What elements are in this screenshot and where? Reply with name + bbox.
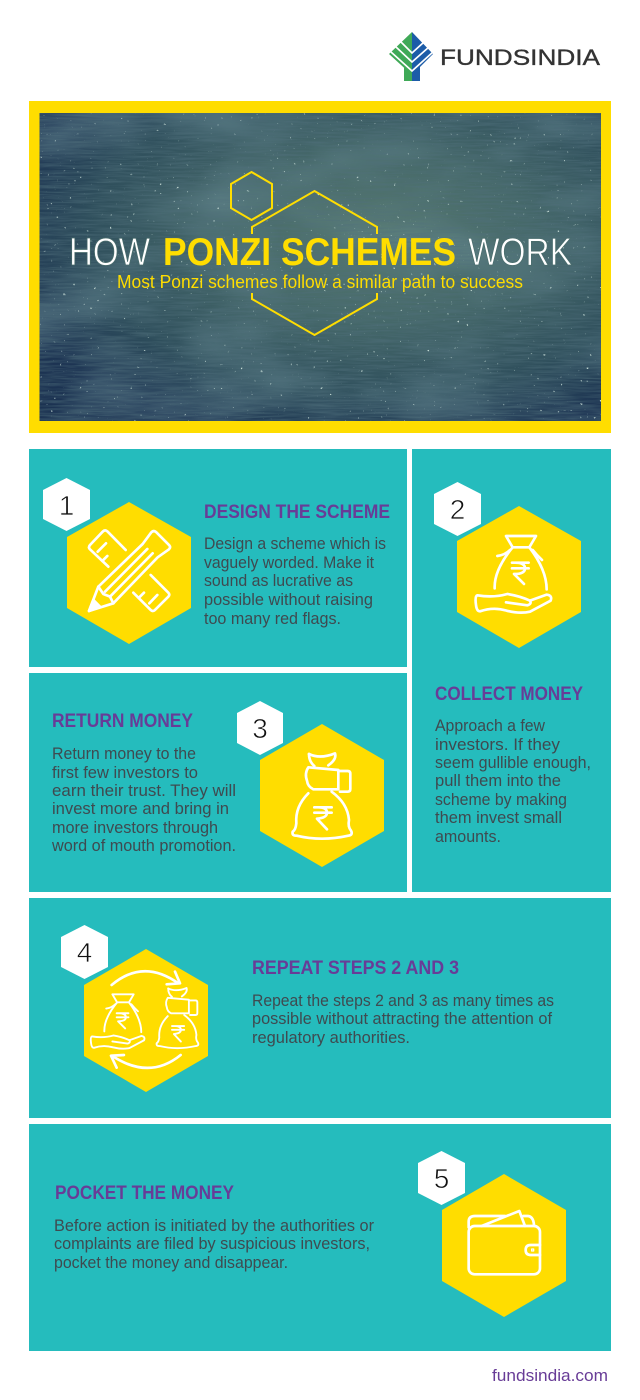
footer url: fundsindia.com xyxy=(492,1366,608,1385)
icon: logo tree xyxy=(389,32,433,81)
body text: vaguely worded. Make it xyxy=(204,554,374,572)
yellow hexagon xyxy=(84,949,208,1092)
body text: seem gullible enough, xyxy=(435,754,591,772)
body text: Approach a few xyxy=(435,717,545,735)
heading: DESIGN THE SCHEME xyxy=(204,502,390,523)
yellow hexagon xyxy=(260,724,384,867)
number badge 1: 1 xyxy=(59,490,74,521)
body text: first few investors to xyxy=(52,764,198,782)
number badge 3 xyxy=(237,701,283,755)
title xyxy=(69,231,572,274)
panel: step 5 pocket the money xyxy=(29,1124,611,1351)
body text xyxy=(204,535,386,628)
body text xyxy=(252,992,554,1047)
body text xyxy=(51,745,236,855)
body text: word of mouth promotion. xyxy=(51,837,236,855)
yellow hexagon xyxy=(457,506,581,648)
number badge 1 xyxy=(43,478,90,531)
heading: POCKET THE MONEY xyxy=(55,1183,234,1204)
body text: sound as lucrative as xyxy=(204,572,353,590)
icon: money bag in hand xyxy=(476,536,551,613)
body text: Repeat the steps 2 and 3 as many times as xyxy=(252,992,554,1010)
panel: step 1 design the scheme xyxy=(29,449,407,667)
yellow hexagon xyxy=(442,1174,566,1317)
body text: earn their trust. They will xyxy=(52,782,236,800)
title: PONZI SCHEMES xyxy=(163,231,456,274)
yellow hexagon xyxy=(67,502,191,644)
decorative outline hexagons xyxy=(231,172,377,335)
body text: regulatory authorities. xyxy=(252,1029,410,1047)
body text: them invest small xyxy=(435,809,562,827)
body text: too many red flags. xyxy=(204,610,341,628)
icon: fist holding money bag xyxy=(292,753,352,839)
body text: complaints are filed by suspicious investors, xyxy=(54,1235,370,1253)
body text: Before action is initiated by the authorities or xyxy=(54,1217,375,1235)
panel: step 3 return money xyxy=(29,673,407,892)
heading: COLLECT MONEY xyxy=(435,684,583,705)
number badge 5: 5 xyxy=(434,1163,449,1194)
logo: FundsIndia xyxy=(389,32,600,81)
panel: step 4 repeat steps xyxy=(29,898,611,1118)
body text: scheme by making xyxy=(435,791,567,809)
body text: pocket the money and disappear. xyxy=(54,1254,288,1272)
icon: wallet xyxy=(469,1211,540,1274)
body text xyxy=(54,1217,375,1272)
body text: Return money to the xyxy=(52,745,196,763)
number badge 2: 2 xyxy=(450,494,465,525)
body text: investors. If they xyxy=(435,736,561,754)
body text: invest more and bring in xyxy=(52,800,229,818)
body text: Design a scheme which is xyxy=(204,535,386,553)
body text: pull them into the xyxy=(435,772,561,790)
body text: possible without raising xyxy=(204,591,373,609)
panel: hero banner xyxy=(29,101,611,433)
number badge 4 xyxy=(61,925,108,979)
body text: possible without attracting the attention of xyxy=(252,1010,552,1028)
title: WORK xyxy=(468,231,572,274)
heading: REPEAT STEPS 2 AND 3 xyxy=(252,958,459,979)
icon: pencil and ruler xyxy=(89,530,170,611)
icon: repeating cycle of money bags xyxy=(91,971,198,1068)
logo wordmark: FUNDSINDIA xyxy=(440,45,600,70)
body text: more investors through xyxy=(52,819,218,837)
number badge 2 xyxy=(434,482,481,536)
subtitle: Most Ponzi schemes follow a similar path to success xyxy=(117,272,523,292)
number badge 5 xyxy=(418,1151,465,1205)
number badge 4: 4 xyxy=(77,937,92,968)
number badge 3: 3 xyxy=(252,713,268,744)
heading: RETURN MONEY xyxy=(52,711,193,732)
body text: amounts. xyxy=(435,828,501,846)
body text xyxy=(435,717,591,846)
panel: step 2 collect money xyxy=(412,449,611,892)
title: HOW xyxy=(69,231,150,274)
